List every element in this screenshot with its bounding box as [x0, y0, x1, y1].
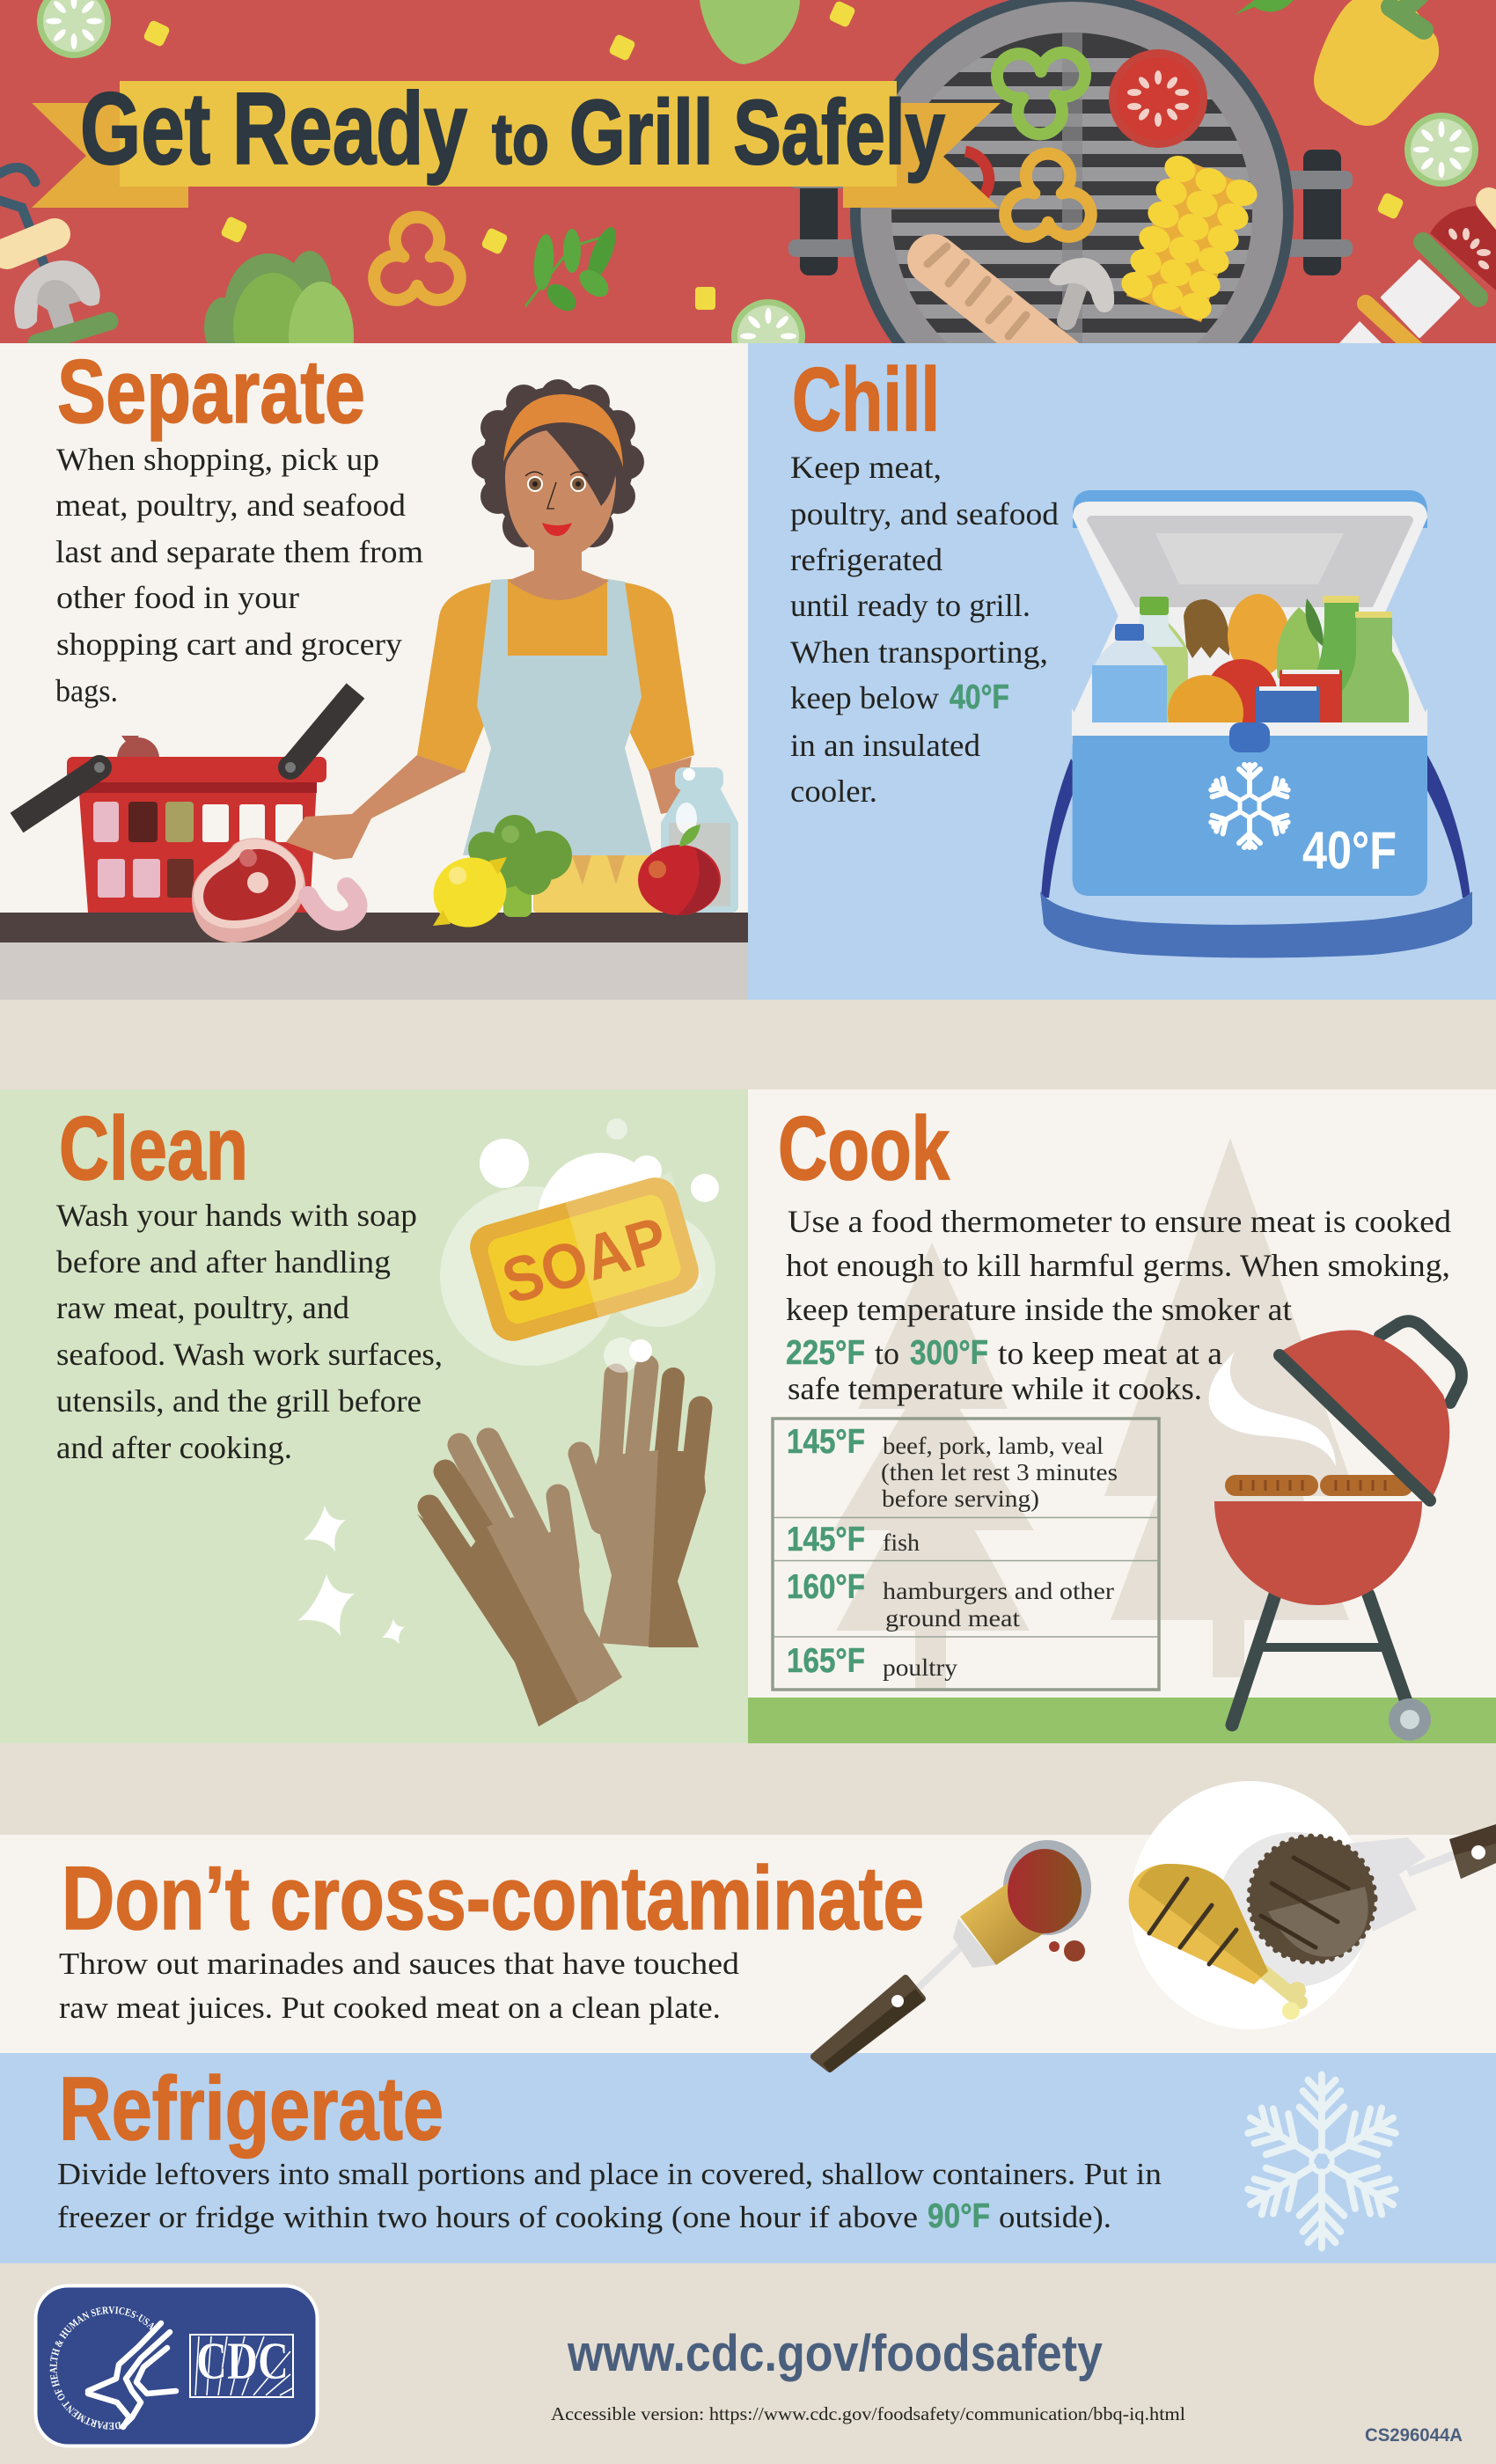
icon: steak	[192, 838, 305, 942]
text: separate body: last and separate them from	[55, 534, 423, 569]
table: safe temperatures: fish	[883, 1529, 920, 1556]
text: clean body: seafood. Wash work surfaces,	[56, 1337, 443, 1372]
icon: cucumber slices	[37, 0, 1478, 373]
heading: clean: Clean	[59, 1098, 248, 1199]
icon: eagle	[88, 2323, 176, 2427]
panel: refrigerate	[0, 2053, 1496, 2263]
text: cook body: keep temperature inside the smoker at	[786, 1292, 1292, 1327]
seal text: DEPARTMENT OF HEALTH & HUMAN SERVICES·USA	[49, 2306, 154, 2430]
illustration: kettle grill	[1209, 1321, 1462, 1741]
text: cook body: 225°F	[786, 1334, 865, 1372]
table: safe temperatures: 160°F	[787, 1568, 865, 1606]
text: chill body: cooler.	[790, 774, 877, 809]
heading: cook: Cook	[778, 1098, 950, 1199]
icon: shopping basket	[17, 691, 356, 913]
label: 40F: 40°F	[1302, 821, 1397, 880]
icon: pine trees	[833, 1138, 1356, 1690]
text: refrigerate body	[57, 2157, 1162, 2235]
text: cook body: 300°F	[910, 1334, 988, 1372]
icon: broccoli	[468, 815, 572, 917]
icon: lemon	[422, 846, 518, 939]
icon: red pepper hook	[965, 151, 989, 195]
panel: chill	[748, 343, 1496, 1000]
text: cross-contaminate body: Throw out marinades and sauces that have touched	[59, 1947, 740, 1981]
text: cook body	[786, 1204, 1451, 1406]
text: cook body: Use a food thermometer to ensure meat is cooked	[788, 1204, 1451, 1239]
illustration: woman	[417, 379, 694, 855]
text: cook body: safe temperature while it cooks.	[788, 1371, 1202, 1406]
text: chill body: When transporting,	[790, 634, 1048, 670]
footer url: www.cdc.gov/foodsafety	[567, 2325, 1103, 2382]
table: safe temperatures: 145°F	[787, 1423, 865, 1461]
icon: green pepper ring	[991, 46, 1091, 141]
icon: left vegetable skewer	[0, 167, 109, 343]
text: clean body: raw meat, poultry, and	[56, 1290, 349, 1325]
illustration: cooler	[1040, 490, 1472, 957]
text: separate body: bags.	[55, 673, 118, 708]
text: separate body: meat, poultry, and seafood	[55, 488, 406, 523]
icon: snowflake	[1208, 765, 1291, 847]
illustration: basting brush and sauce	[814, 1840, 1091, 2072]
panel: cook	[748, 1089, 1496, 1743]
icon: right glove	[580, 1367, 706, 1647]
icon: baguette	[928, 246, 1082, 378]
text: refrigerate body: outside).	[999, 2200, 1111, 2234]
table: safe temperatures: before serving)	[882, 1485, 1039, 1512]
icon: green pepper top	[700, 0, 800, 64]
text: clean body: utensils, and the grill before	[56, 1383, 422, 1419]
text: cook body: hot enough to kill harmful germs. When smoking,	[786, 1248, 1450, 1283]
title: to	[492, 99, 549, 180]
panel: clean	[0, 1089, 748, 1743]
icon: herb top right	[1235, 0, 1294, 15]
heading: refrigerate: Refrigerate	[59, 2058, 444, 2159]
icon: grill handles	[788, 150, 1353, 275]
text: refrigerate body: freezer or fridge within two hours of cooking (one hour if above	[57, 2200, 918, 2234]
text: clean body	[56, 1198, 443, 1465]
label: soap: SOAP	[495, 1204, 675, 1318]
icon: shrimp	[308, 887, 358, 921]
text: refrigerate body: Divide leftovers into small portions and place in covered, shallow containers. Put in	[57, 2157, 1162, 2191]
text: chill body: 40°F	[950, 678, 1009, 716]
table: safe temperatures: 145°F	[787, 1521, 865, 1558]
icon: yellow bell pepper	[1314, 0, 1439, 126]
table: safe temperatures: 165°F	[787, 1642, 865, 1680]
table: safe temperatures: (then let rest 3 minutes	[881, 1459, 1118, 1485]
icon: yellow corn kernels	[143, 0, 1404, 310]
panel: don't cross-contaminate	[0, 1835, 1496, 2053]
text: chill body	[790, 450, 1059, 809]
text: cook body: to keep meat at a	[998, 1336, 1222, 1371]
heading: separate: Separate	[57, 341, 365, 442]
icon: corn cob	[1118, 151, 1261, 324]
text: separate body	[55, 442, 423, 708]
title: Get Ready	[80, 71, 467, 186]
icon: large snowflake	[1239, 2075, 1404, 2248]
arm and hand	[286, 755, 465, 860]
publication code: CS296044A	[1365, 2425, 1463, 2446]
text: cook body: to	[875, 1336, 899, 1371]
icon: grill	[850, 0, 1294, 343]
text: chill body: poultry, and seafood	[790, 496, 1059, 532]
icon: right vegetable skewer	[1338, 201, 1496, 350]
logo: HHS and CDC	[33, 2284, 319, 2448]
grass	[748, 1698, 1496, 1743]
text: chill body: in an insulated	[790, 728, 980, 763]
text: chill body: until ready to grill.	[790, 588, 1030, 623]
ribbon	[32, 81, 1001, 208]
icon: lettuce	[204, 251, 354, 343]
icon: tomato slice	[1109, 49, 1207, 148]
icon: left glove	[417, 1440, 622, 1727]
text: cross-contaminate body: raw meat juices. Put cooked meat on a clean plate.	[59, 1991, 721, 2025]
icon: soap bubbles	[440, 1118, 719, 1366]
table: safe temperatures: ground meat	[885, 1605, 1021, 1632]
text: refrigerate body: 90°F	[928, 2197, 990, 2235]
accessible version line: Accessible version: https://www.cdc.gov/foodsafety/communication/bbq-iq.html	[551, 2403, 1185, 2424]
heading: chill: Chill	[792, 349, 940, 450]
text: chill body: keep below	[790, 680, 939, 715]
icon: apple	[638, 825, 721, 915]
text: chill body: refrigerated	[790, 542, 942, 577]
counter	[0, 913, 748, 1000]
icon: soap bar	[465, 1172, 704, 1346]
heading: don't cross-contaminate: Don’t cross-contaminate	[62, 1848, 924, 1948]
panel: banner	[0, 0, 1496, 343]
text: separate body: When shopping, pick up	[56, 442, 379, 477]
title	[83, 89, 946, 186]
title: Grill Safely	[569, 82, 945, 184]
icon: yellow bread	[533, 855, 663, 913]
table: safe temperatures: poultry	[883, 1654, 958, 1681]
icon: orange pepper ring	[374, 217, 460, 300]
illustration: plate with chicken and burger	[1129, 1781, 1496, 2029]
text: separate body: shopping cart and grocery	[56, 627, 402, 662]
table: safe temperatures	[773, 1419, 1159, 1690]
text: chill body: Keep meat,	[790, 450, 942, 485]
icon: orange pepper ring on grill	[1005, 154, 1091, 237]
text: clean body: and after cooking.	[56, 1430, 292, 1465]
icon: milk bottle	[661, 767, 738, 913]
icon: mushroom on grill	[1049, 258, 1114, 320]
panel: separate	[0, 341, 748, 1000]
table: safe temperatures: beef, pork, lamb, veal	[883, 1433, 1104, 1459]
text: separate body: other food in your	[56, 580, 299, 615]
table: safe temperatures: hamburgers and other	[883, 1578, 1114, 1604]
foam on glove	[604, 1338, 652, 1373]
icon: herb sprig	[524, 227, 616, 312]
text: clean body: before and after handling	[56, 1244, 391, 1280]
text: clean body: Wash your hands with soap	[56, 1198, 417, 1233]
icon: CDC box: CDC	[196, 2332, 289, 2390]
text: cross-contaminate body	[59, 1947, 740, 2025]
icon: sparkles	[298, 1506, 405, 1644]
